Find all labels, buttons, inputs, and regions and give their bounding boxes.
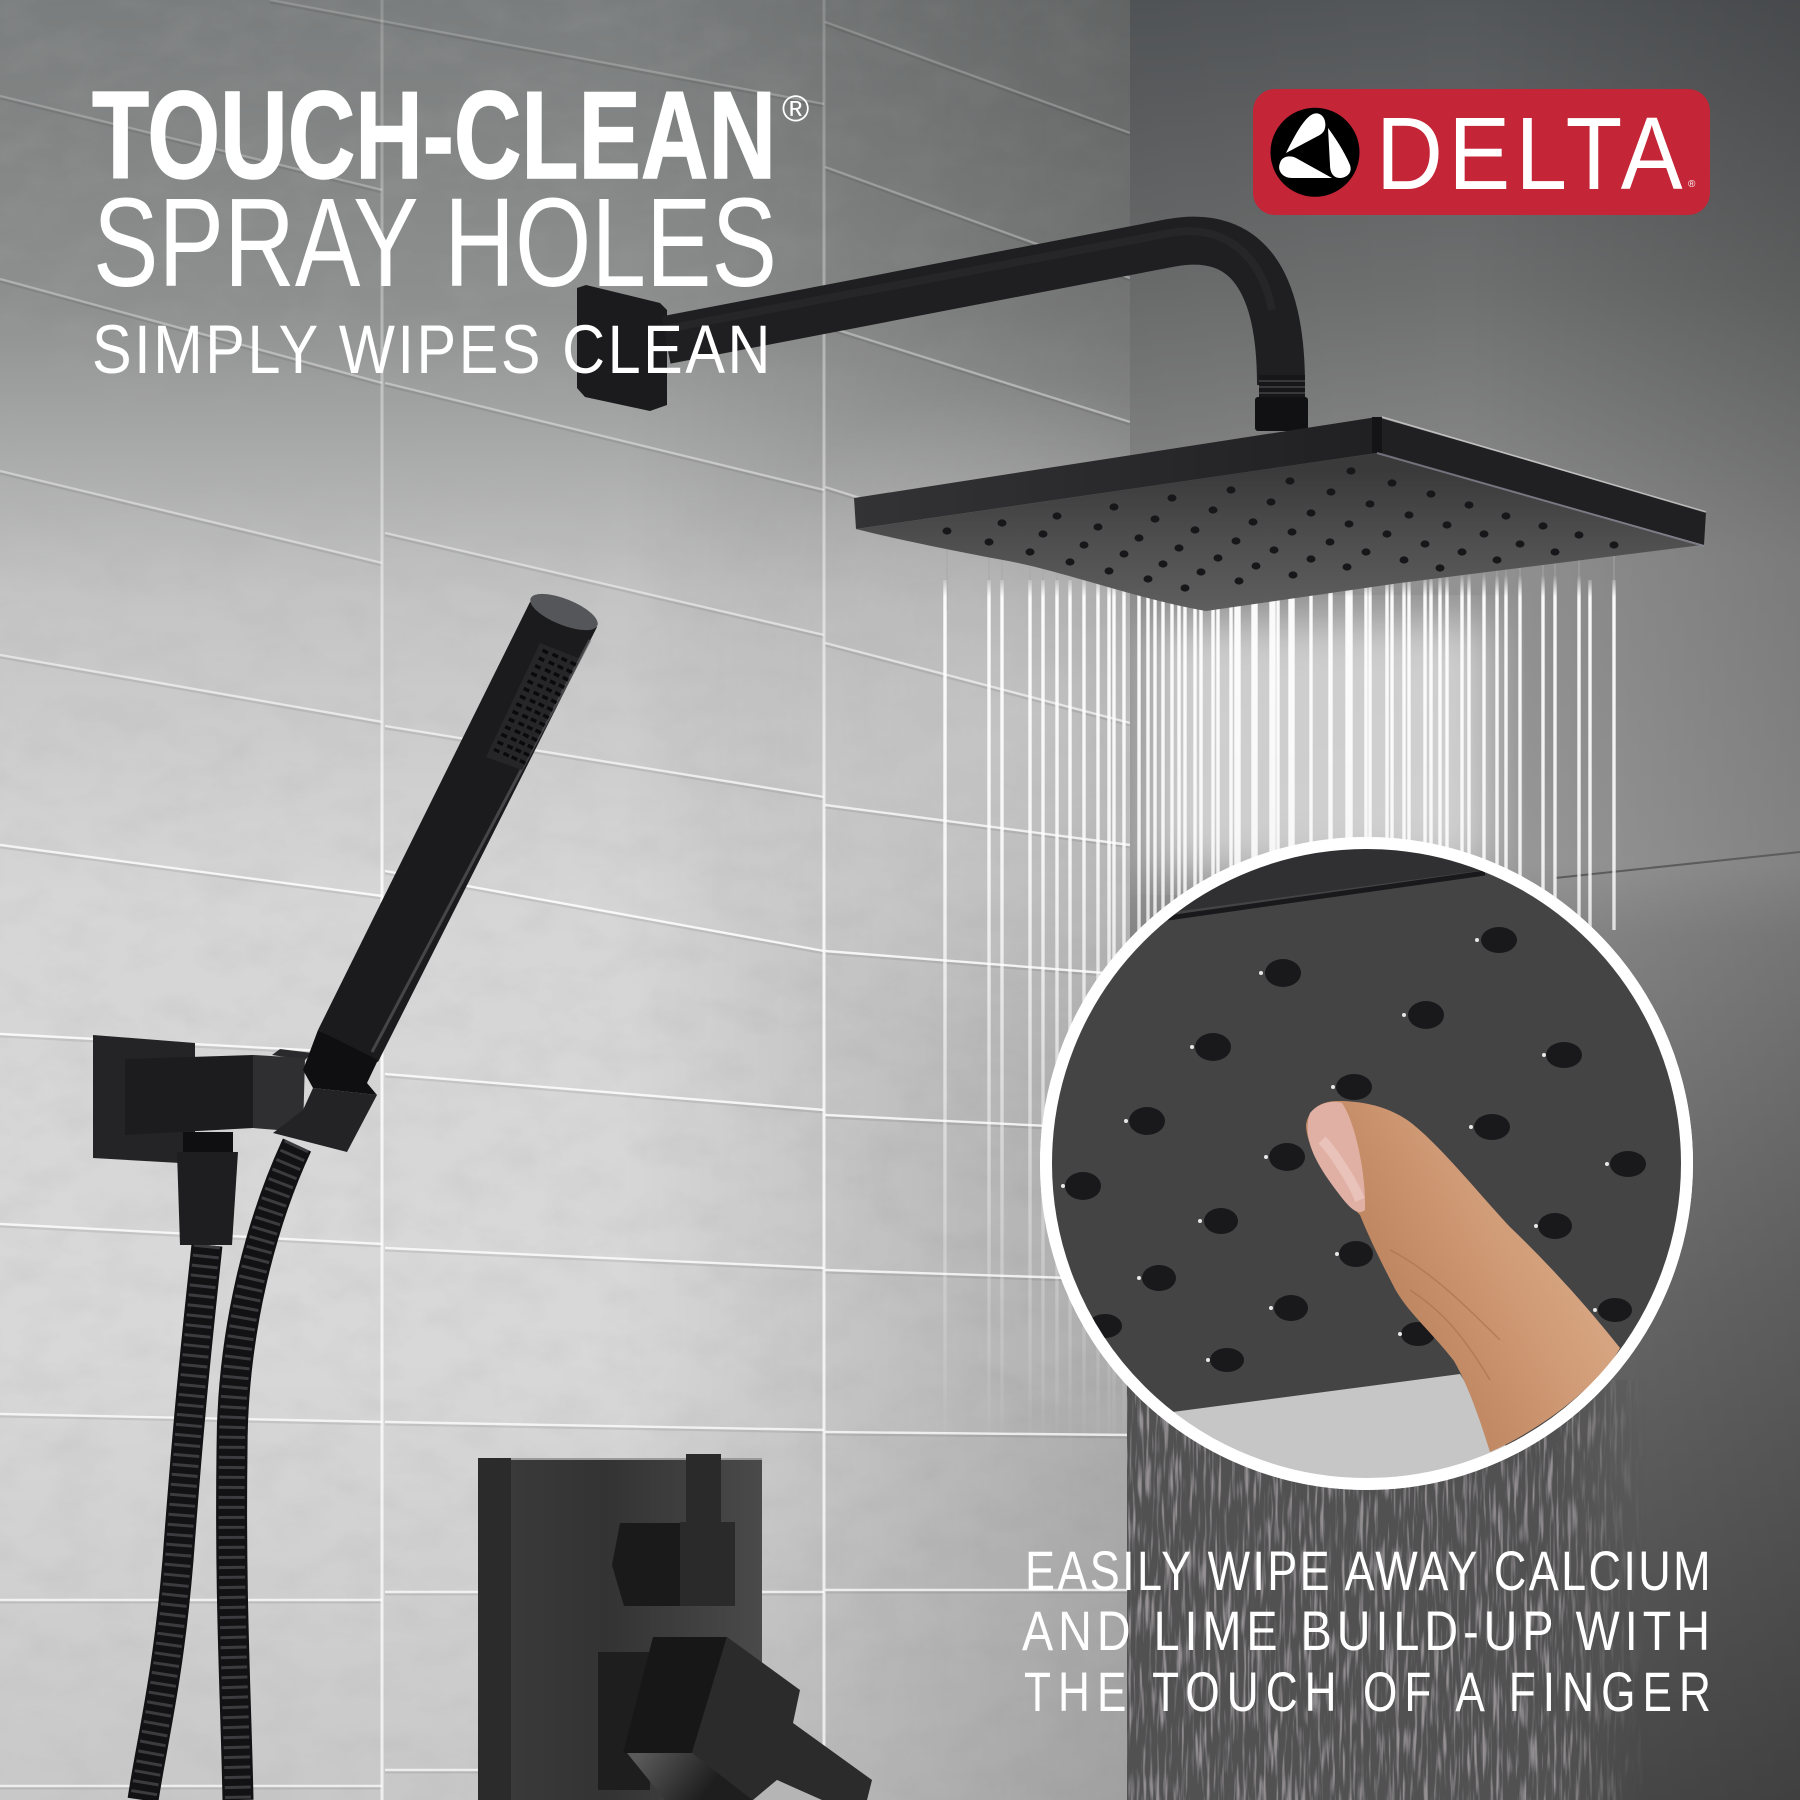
lens top band (1178, 849, 1480, 912)
hose right (232, 1145, 297, 1800)
finger (1306, 1101, 1620, 1452)
registered mark: ® (782, 88, 809, 129)
panel: dark back wall (1130, 0, 1800, 1800)
subheading: SIMPLY WIPES CLEAN (92, 311, 773, 388)
callout: magnified spray face (1040, 830, 1694, 1500)
bracket holder (273, 1088, 377, 1152)
headline bold: TOUCH-CLEAN (92, 67, 776, 205)
head underside (856, 453, 1702, 611)
DELTA wordmark: DELTA (1376, 96, 1688, 211)
registered mark small: ® (1688, 179, 1696, 190)
icon: wall-mounted shower arm (577, 231, 1308, 431)
lens background (1052, 870, 1681, 1446)
title (92, 67, 809, 388)
head rim (854, 417, 1706, 545)
hose left (143, 1245, 207, 1800)
icon: hand shower and bracket (93, 586, 602, 1800)
icon: Delta emblem (1270, 108, 1360, 197)
hand shower end cap (526, 586, 602, 638)
arm collar (1255, 397, 1308, 431)
arm thread (1259, 375, 1305, 399)
tub spout (623, 1637, 872, 1800)
handle collar (303, 1030, 378, 1095)
bracket ear (272, 1049, 312, 1060)
icon: shower valve and tub spout (478, 1454, 872, 1800)
hand shower spray face (486, 643, 578, 770)
arm wall plate (577, 285, 667, 411)
handle tube (318, 602, 597, 1062)
connector thread (183, 1132, 233, 1154)
panel: tiled wall background (0, 0, 1130, 1800)
falling water haze (1150, 620, 1490, 870)
lower water spray (1127, 1380, 1647, 1800)
bracket arm (125, 1055, 253, 1135)
icon: rain shower head (854, 417, 1706, 611)
text block: callout description (1022, 1539, 1718, 1723)
bright stream bodies (945, 575, 1614, 1450)
head spray nozzles (942, 467, 1618, 592)
headline light: SPRAY HOLES (93, 172, 777, 313)
valve handle (612, 1454, 735, 1606)
valve plate (478, 1458, 762, 1800)
lens bottom light surface (1174, 1374, 1506, 1478)
lens nozzles (1061, 927, 1646, 1372)
hose connector (177, 1152, 238, 1245)
thin stream starts (947, 471, 1614, 610)
diverter base (598, 1652, 650, 1790)
water streams (945, 471, 1614, 1450)
bracket wall plate (93, 1035, 195, 1163)
Delta logo badge (1253, 89, 1710, 215)
